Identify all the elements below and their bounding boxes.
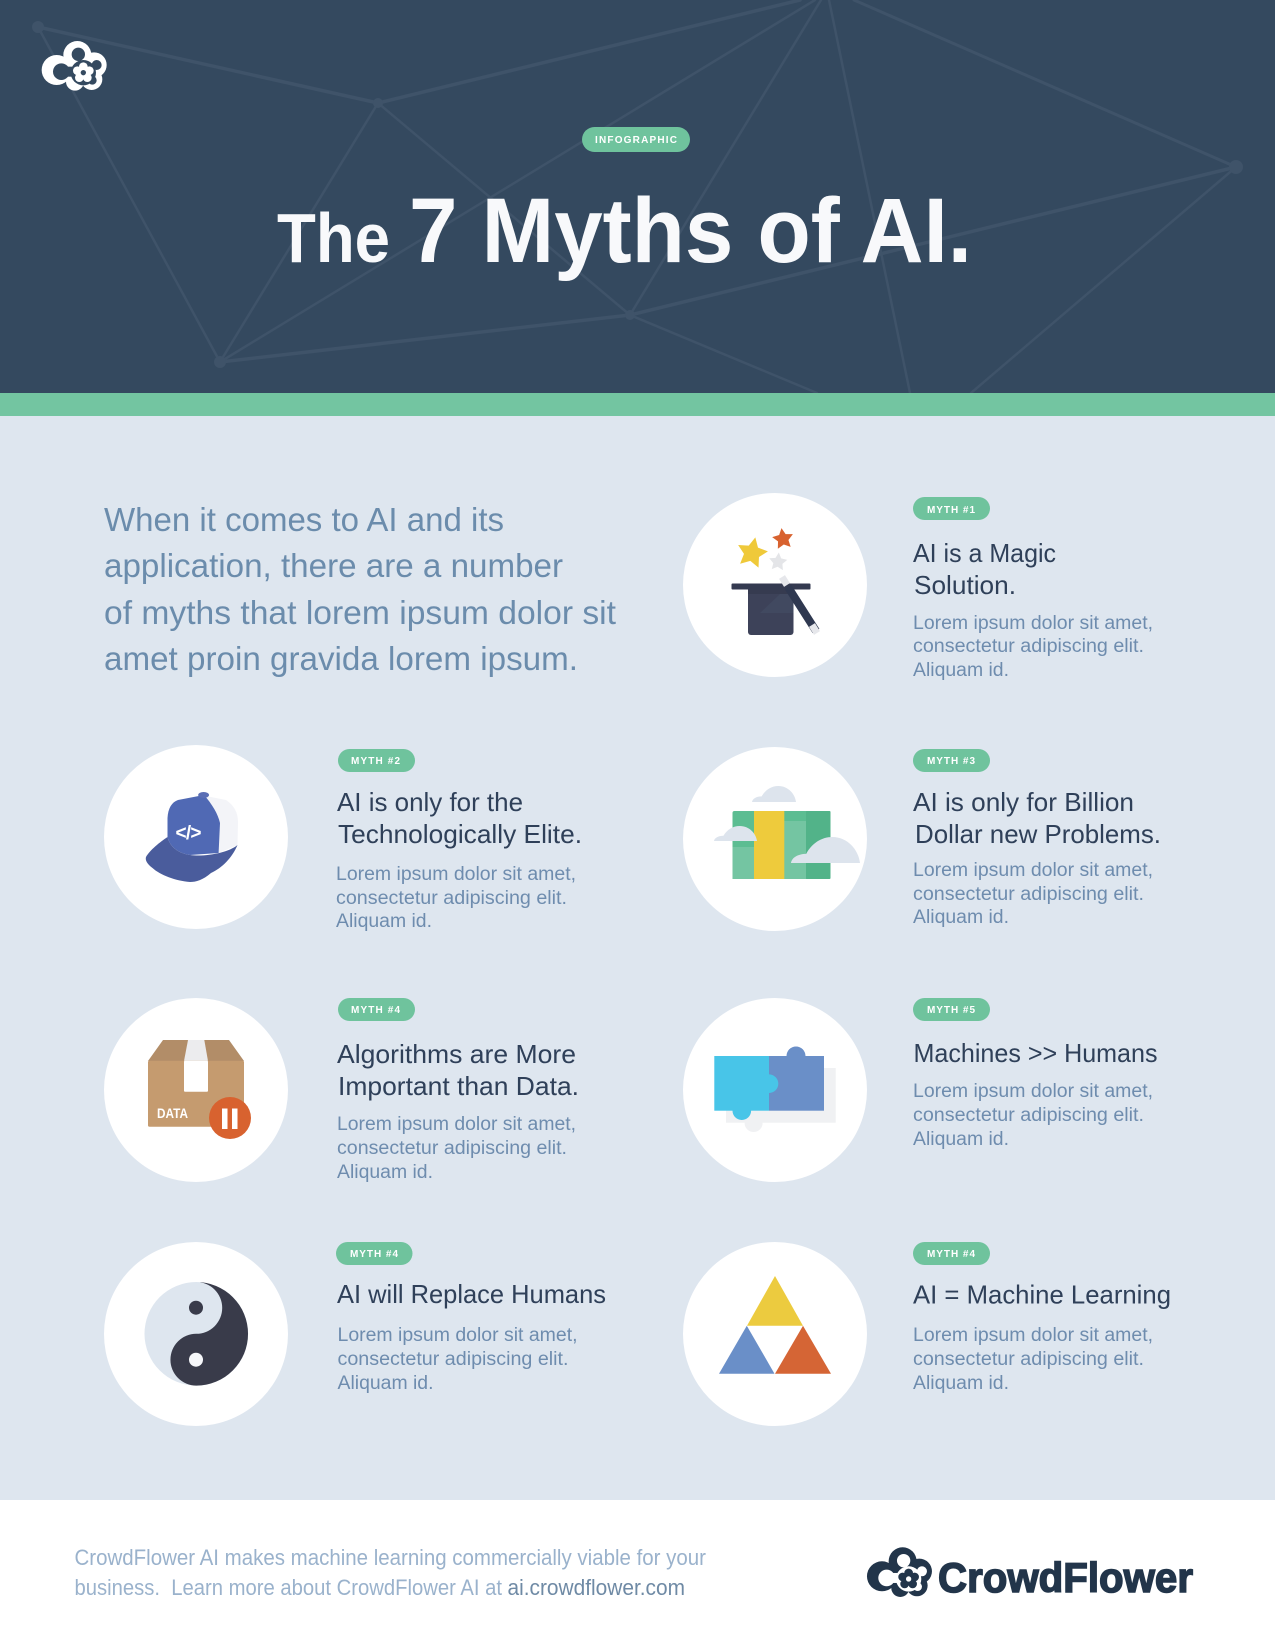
myth body: Lorem ipsum dolor sit amet,	[338, 1325, 578, 1346]
myth 2 heading: Technologically Elite.	[338, 819, 582, 849]
myth 2 body: Lorem ipsum dolor sit amet,	[336, 864, 576, 885]
myth 5 body: Lorem ipsum dolor sit amet,	[913, 1081, 1153, 1102]
panel: myth 1	[683, 493, 1153, 681]
intro text: of myths that lorem ipsum dolor sit	[104, 594, 616, 631]
myth heading: AI will Replace Humans	[337, 1279, 606, 1309]
footer text: business. Learn more about CrowdFlower AI at	[74, 1575, 502, 1600]
network background pattern	[32, 0, 1243, 393]
intro text: When it comes to AI and its	[104, 501, 504, 538]
myth 5 tag: MYTH #5	[927, 1005, 975, 1016]
myth 3 body	[913, 860, 1153, 928]
myth body: consectetur adipiscing elit.	[913, 1349, 1144, 1370]
panel: myth 5	[683, 998, 1158, 1182]
icon: baseball cap	[146, 792, 238, 882]
panel: myth 4	[104, 998, 579, 1183]
myth body: Aliquam id.	[913, 1373, 1009, 1394]
icon: baseball cap: </>	[176, 823, 202, 844]
myth 4 heading	[337, 1039, 579, 1101]
panel: footer	[0, 1500, 1275, 1650]
myth 5 heading: Machines >> Humans	[914, 1038, 1158, 1068]
myth body	[338, 1325, 578, 1394]
icon: triangles	[719, 1276, 831, 1374]
myth 1 body: consectetur adipiscing elit.	[913, 636, 1144, 657]
icon: white CrowdFlower logo	[42, 41, 107, 91]
icon: data box with pause	[148, 1040, 251, 1139]
infographic tag: INFOGRAPHIC	[595, 135, 677, 146]
icon: puzzle pieces	[714, 1046, 836, 1132]
myth 4 tag	[338, 998, 415, 1021]
myth 1 heading: AI is a Magic	[913, 538, 1056, 568]
myth 1 tag: MYTH #1	[927, 505, 975, 516]
myth 3 body: Lorem ipsum dolor sit amet,	[913, 860, 1153, 881]
icon: money and clouds	[714, 786, 860, 879]
myth 2 heading	[337, 787, 582, 849]
myth 4 heading: Algorithms are More	[337, 1039, 576, 1069]
myth 2 body: consectetur adipiscing elit.	[336, 888, 567, 909]
myth 4 body: Lorem ipsum dolor sit amet,	[337, 1114, 576, 1135]
panel: myth 3	[683, 747, 1161, 931]
myth 2 body: Aliquam id.	[336, 911, 432, 932]
myth 5 body: consectetur adipiscing elit.	[913, 1105, 1144, 1126]
myth 2 tag: MYTH #2	[351, 756, 400, 767]
myth 3 body: consectetur adipiscing elit.	[913, 884, 1144, 905]
green divider band	[0, 393, 1275, 416]
intro text: application, there are a number	[104, 547, 563, 584]
panel: myth AI equals machine learning	[683, 1242, 1171, 1426]
panel: myth 2	[104, 745, 582, 932]
myth tag: MYTH #4	[927, 1249, 975, 1260]
myth 5 body	[913, 1081, 1153, 1150]
myth 3 heading: Dollar new Problems.	[915, 819, 1161, 849]
myth heading: AI = Machine Learning	[913, 1280, 1171, 1310]
myth body: consectetur adipiscing elit.	[338, 1349, 568, 1370]
footer text: CrowdFlower AI makes machine learning commercially viable for your	[74, 1545, 706, 1570]
icon: dark CrowdFlower logo	[867, 1547, 932, 1597]
intro text	[104, 501, 616, 677]
panel: myth AI will replace humans	[104, 1242, 606, 1426]
myth body: Lorem ipsum dolor sit amet,	[913, 1325, 1153, 1346]
myth 1 tag	[913, 497, 990, 520]
icon: magic hat and stars	[732, 527, 817, 635]
icon: yin yang	[144, 1282, 248, 1386]
myth 3 heading: AI is only for Billion	[913, 787, 1134, 817]
myth tag	[913, 1242, 990, 1265]
CrowdFlower wordmark: CrowdFlower	[938, 1554, 1193, 1601]
myth 4 heading: Important than Data.	[338, 1071, 579, 1101]
myth body	[913, 1325, 1153, 1394]
icon: data box with pause: DATA	[157, 1105, 188, 1121]
myth 5 tag	[913, 998, 990, 1021]
myth 2 body	[336, 864, 576, 932]
myth 1 heading	[913, 538, 1056, 600]
myth 3 heading	[913, 787, 1161, 849]
infographic tag	[582, 127, 690, 152]
myth 3 tag	[913, 749, 990, 772]
myth 4 tag: MYTH #4	[351, 1005, 400, 1016]
myth body: Aliquam id.	[338, 1373, 434, 1394]
myth 2 tag	[338, 749, 415, 772]
myth 3 body: Aliquam id.	[913, 907, 1009, 928]
myth 4 body: Aliquam id.	[337, 1162, 433, 1183]
myth 1 body	[913, 613, 1153, 681]
myth 2 heading: AI is only for the	[337, 787, 523, 817]
myth 3 tag: MYTH #3	[927, 756, 975, 767]
footer text: ai.crowdflower.com	[508, 1575, 685, 1600]
myth 4 body: consectetur adipiscing elit.	[337, 1138, 567, 1159]
myth 1 body: Lorem ipsum dolor sit amet,	[913, 613, 1153, 634]
footer text	[74, 1545, 706, 1600]
myth 4 body	[337, 1114, 576, 1183]
myth tag	[336, 1242, 412, 1265]
panel: header	[0, 0, 1275, 393]
title: 7 Myths of AI.	[409, 180, 972, 282]
myth tag: MYTH #4	[350, 1249, 398, 1260]
myth 1 body: Aliquam id.	[913, 660, 1009, 681]
myth 5 body: Aliquam id.	[913, 1129, 1009, 1150]
intro text: amet proin gravida lorem ipsum.	[104, 640, 578, 677]
myth 1 heading: Solution.	[914, 570, 1016, 600]
title: The	[277, 199, 390, 277]
